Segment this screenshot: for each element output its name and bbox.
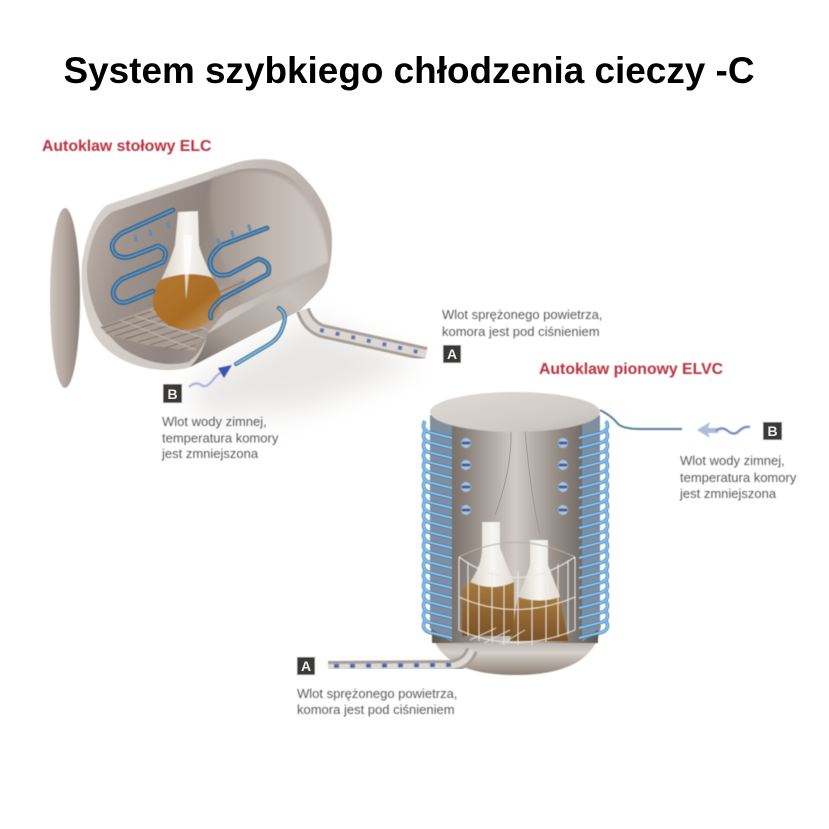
back flask: [462, 522, 514, 636]
water inflow arrow: [697, 422, 750, 438]
cooling coil left: [112, 210, 173, 302]
caption: compressed air inlet: Wlot sprężonego powietrza,: [297, 686, 457, 701]
caption: compressed air inlet: komora jest pod ciśnieniem: [442, 324, 600, 339]
caption: compressed air inlet: komora jest pod ciśnieniem: [297, 702, 455, 717]
label B: B: [767, 423, 778, 439]
air pipe with holes: [303, 310, 426, 354]
label A: [297, 657, 315, 675]
label B: [763, 422, 782, 440]
flask: [153, 211, 221, 330]
lid: [430, 392, 600, 432]
dome bottom: [430, 625, 601, 675]
label B: B: [167, 386, 178, 402]
heading: vertical autoclave: Autoklaw pionowy ELVC: [539, 361, 723, 378]
water inlet pipe: [600, 410, 682, 429]
air pipe with holes: [328, 650, 472, 667]
left cooling coil: [424, 421, 452, 638]
chamber interior: [87, 168, 328, 364]
caption: water inlet: Wlot wody zimnej,: [162, 414, 267, 429]
wire shelf: [100, 278, 245, 351]
outer water coil: [236, 308, 285, 364]
caption: water inlet: temperatura komory: [680, 470, 797, 485]
label A: A: [447, 346, 457, 362]
front flask: [510, 540, 568, 641]
door disc: [50, 208, 80, 388]
caption: water inlet: jest zmniejszona: [679, 486, 777, 501]
chamber end wall: [210, 171, 328, 303]
autoclave shell: [81, 159, 332, 370]
cooling coil right: [210, 228, 269, 318]
lower outer shell: [190, 263, 328, 367]
panel: vertical autoclave ELVC: [297, 361, 797, 717]
air nozzles: [461, 438, 568, 515]
caption: water inlet: Wlot wody zimnej,: [680, 453, 785, 468]
right cooling coil: [579, 421, 607, 638]
label B: [163, 384, 182, 403]
heading: table-top autoclave: Autoklaw stołowy ELC: [42, 138, 211, 155]
label A: [443, 345, 461, 363]
caption: water inlet: temperatura komory: [162, 430, 279, 446]
hanging wires: [495, 430, 540, 535]
water inflow arrow: [189, 365, 232, 387]
caption: water inlet: jest zmniejszona: [161, 446, 259, 461]
wire basket: [459, 542, 575, 645]
panel: table-top autoclave ELC: [42, 138, 602, 461]
title: System szybkiego chłodzenia cieczy -C: [64, 50, 754, 91]
spray nozzles: [135, 223, 250, 244]
soft floor shadow: [190, 320, 420, 415]
cylinder interior: [432, 415, 598, 643]
label A: A: [301, 658, 311, 674]
side walls: [430, 415, 600, 642]
caption: compressed air inlet: Wlot sprężonego powietrza,: [442, 307, 602, 322]
